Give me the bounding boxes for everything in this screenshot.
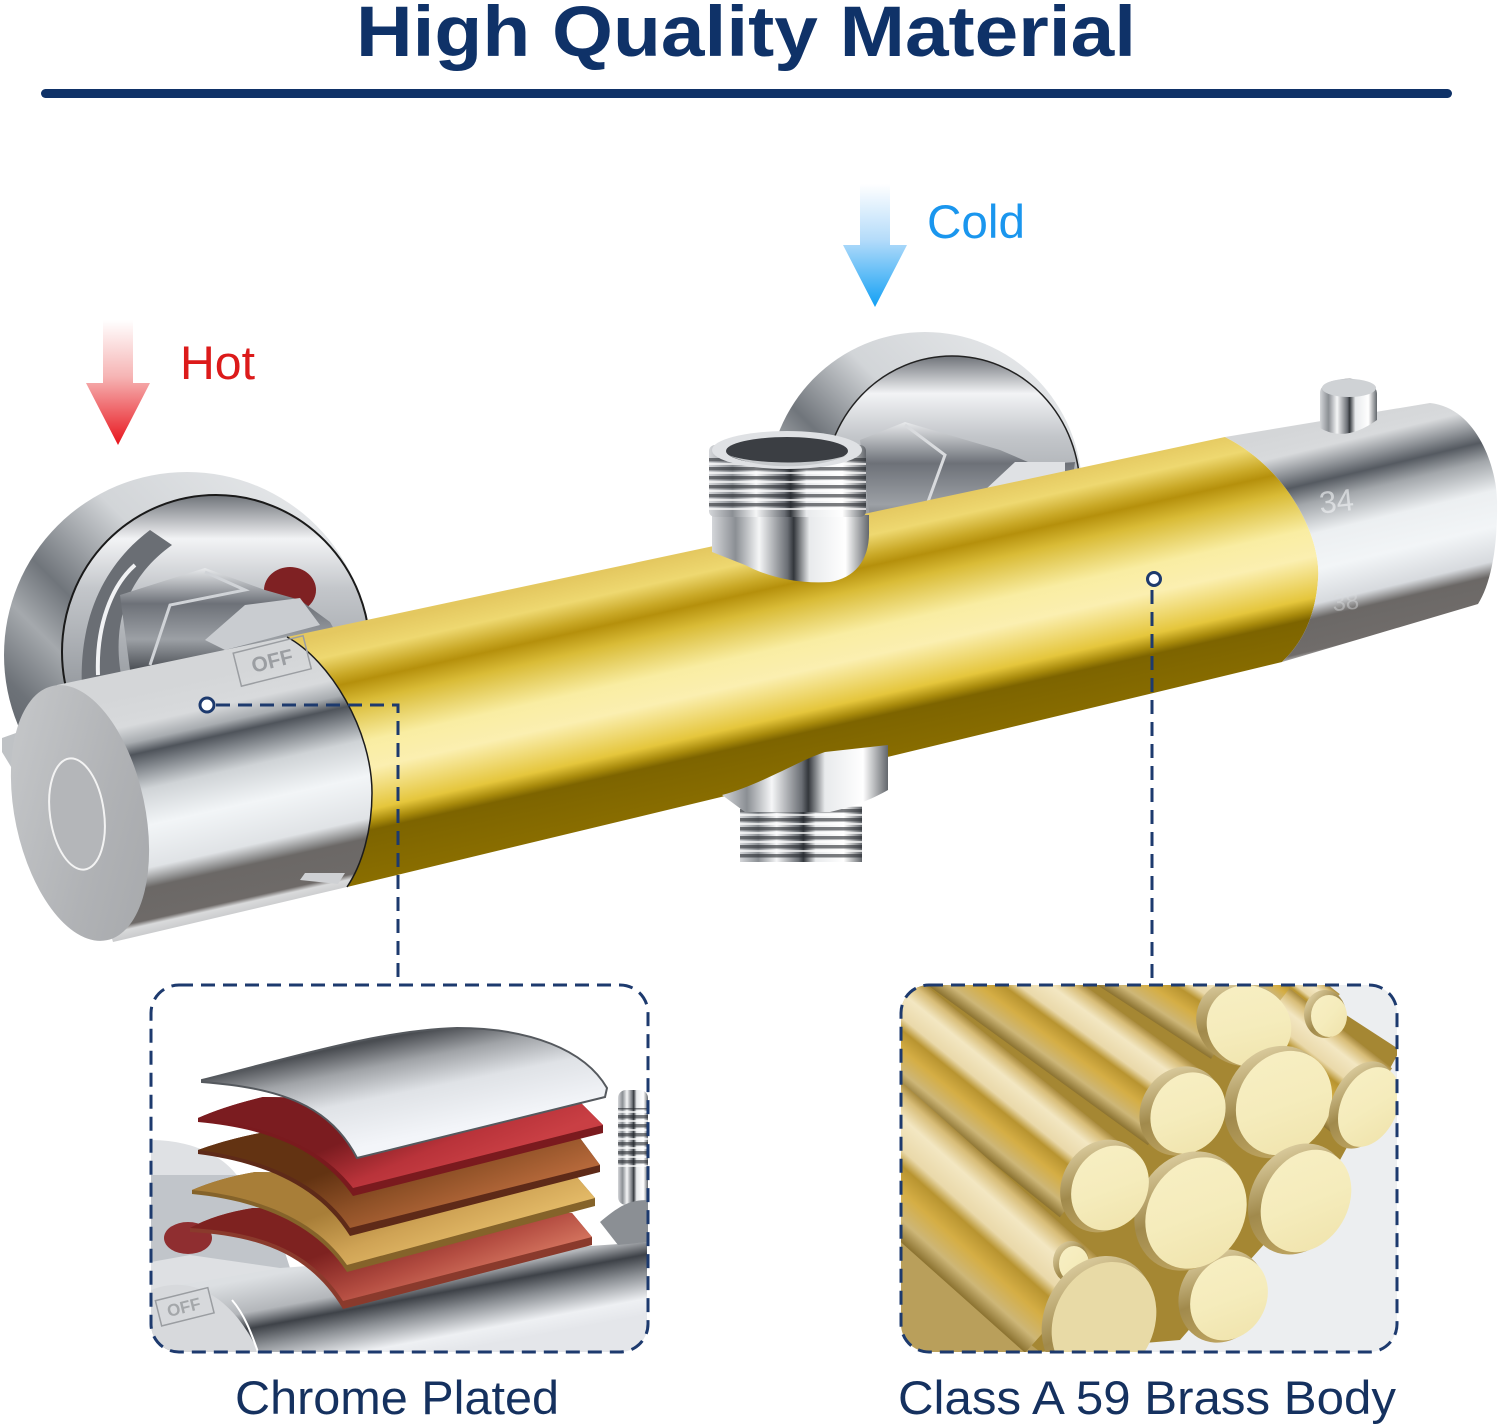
arrow: hot water bbox=[86, 320, 150, 445]
left control handle bbox=[0, 636, 372, 954]
panel: chrome plated layers bbox=[151, 985, 648, 1352]
shower valve product illustration bbox=[0, 332, 1497, 954]
temperature marks: 34 bbox=[1317, 482, 1355, 521]
safety button bbox=[1320, 379, 1377, 434]
rod end 11 bbox=[1042, 1256, 1156, 1352]
label: hot: Hot bbox=[180, 336, 255, 389]
rod end 1 bbox=[1196, 985, 1291, 1066]
handle lever bbox=[2, 733, 16, 775]
handle centre cap bbox=[42, 755, 112, 873]
cold wall mount bbox=[768, 332, 1082, 648]
label: cold: Cold bbox=[927, 195, 1025, 248]
brown layer bbox=[198, 1133, 600, 1236]
rod end 6 bbox=[1060, 1140, 1149, 1232]
rod end 8 bbox=[1248, 1144, 1352, 1254]
brass gold body bbox=[287, 437, 1318, 887]
callout leader: brass bbox=[1148, 572, 1160, 985]
rod end 5 bbox=[1328, 1062, 1397, 1149]
panel background valve bbox=[151, 1090, 648, 1352]
panel dashed border bbox=[901, 985, 1397, 1352]
rods background bbox=[1042, 985, 1397, 1352]
hot wall mount bbox=[4, 472, 370, 838]
title underline bbox=[41, 89, 1452, 98]
label: chrome plated: Chrome Plated bbox=[235, 1371, 559, 1424]
panel background valve: OFF bbox=[165, 1294, 203, 1321]
rod end 4 bbox=[1224, 1046, 1332, 1158]
tan layer bbox=[192, 1172, 595, 1272]
copper layer bbox=[190, 1208, 592, 1309]
off mark: OFF bbox=[249, 645, 296, 678]
chrome layer bbox=[202, 1028, 607, 1158]
label: brass body: Class A 59 Brass Body bbox=[898, 1371, 1397, 1424]
handle face bbox=[0, 672, 171, 954]
right temperature handle: 38 bbox=[1331, 588, 1360, 617]
panel dashed border bbox=[151, 985, 648, 1352]
panel: brass rods bbox=[900, 984, 1398, 1354]
shower symbol bbox=[300, 873, 345, 884]
rod bodies bbox=[901, 985, 1392, 1352]
right temperature handle bbox=[1225, 379, 1497, 662]
off mark bbox=[233, 636, 311, 686]
table shadow bbox=[901, 1242, 1038, 1352]
red hot indicator bbox=[264, 567, 316, 613]
rod end 9 bbox=[1178, 1249, 1268, 1343]
rod end 3 bbox=[1140, 1066, 1226, 1156]
gaps between rods bbox=[901, 985, 1400, 1352]
top threaded outlet bbox=[709, 431, 869, 582]
rod end 7 bbox=[1134, 1151, 1247, 1271]
arrow: cold water bbox=[843, 184, 907, 307]
red layer bbox=[198, 1097, 603, 1196]
bottom threaded outlet bbox=[722, 745, 888, 862]
rod end 2 bbox=[1304, 990, 1347, 1038]
callout leader: chrome bbox=[200, 698, 398, 985]
rod end 10 bbox=[1053, 1241, 1089, 1283]
